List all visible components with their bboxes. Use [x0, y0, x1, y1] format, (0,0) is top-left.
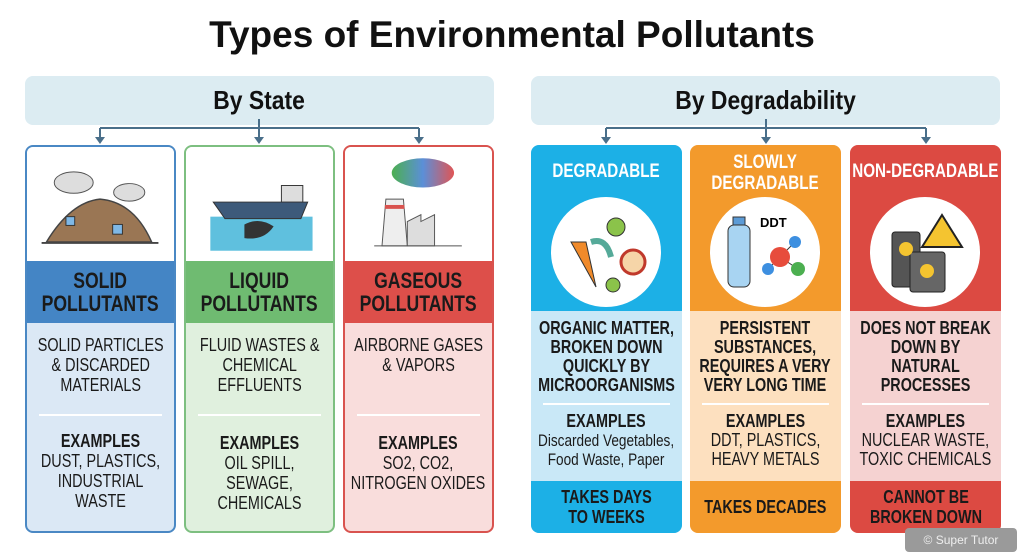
description and examples: EXAMPLES	[726, 411, 805, 431]
description and examples	[538, 318, 675, 469]
band title: POLLUTANTS	[42, 291, 159, 316]
description and examples: MATERIALS	[60, 375, 141, 395]
watermark	[905, 528, 1017, 552]
description and examples: NATURAL	[891, 356, 960, 376]
icon: landfill	[27, 147, 174, 261]
header: by degradability	[531, 76, 1000, 125]
description and examples: FLUID WASTES &	[200, 335, 319, 355]
icon: factory smoke	[345, 147, 492, 261]
description and examples: EFFLUENTS	[218, 375, 302, 395]
band title: GASEOUS	[374, 268, 463, 293]
description and examples: DOES NOT BREAK	[860, 318, 991, 338]
description and examples: Food Waste, Paper	[548, 450, 665, 469]
heading: DEGRADABLE	[553, 161, 660, 182]
duration: BROKEN DOWN	[870, 507, 982, 527]
panel: gaseous	[343, 145, 494, 533]
description and examples: TOXIC CHEMICALS	[860, 449, 991, 469]
description and examples: EXAMPLES	[220, 433, 299, 453]
description and examples: Discarded Vegetables,	[538, 431, 675, 450]
icon: organic waste	[551, 197, 661, 307]
description and examples: ORGANIC MATTER,	[539, 318, 674, 338]
band title: LIQUID	[230, 268, 289, 293]
duration: TAKES DECADES	[704, 497, 827, 517]
panel: liquid	[184, 145, 335, 533]
band title	[345, 261, 492, 323]
description and examples: EXAMPLES	[379, 433, 458, 453]
title: Types of Environmental Pollutants	[209, 14, 815, 55]
description and examples	[351, 335, 486, 493]
description and examples: NUCLEAR WASTE,	[862, 430, 989, 450]
description and examples: SO2, CO2,	[383, 453, 454, 473]
description and examples: CHEMICAL	[222, 355, 297, 375]
description and examples: OIL SPILL,	[225, 453, 294, 473]
band title	[27, 261, 174, 323]
description and examples: WASTE	[75, 491, 126, 511]
description and examples: & VAPORS	[382, 355, 455, 375]
band title: POLLUTANTS	[360, 291, 477, 316]
description and examples: CHEMICALS	[217, 493, 302, 513]
description and examples: DDT, PLASTICS,	[711, 430, 820, 450]
icon: bottle and ddt	[710, 197, 820, 307]
icon: radioactive barrels	[870, 197, 980, 307]
duration	[850, 481, 1001, 533]
description and examples: DOWN BY	[891, 337, 960, 357]
panel: slowly degradable	[690, 145, 841, 533]
panel: non-degradable	[850, 145, 1001, 533]
duration: CANNOT BE	[883, 487, 968, 507]
watermark: © Super Tutor	[924, 533, 998, 547]
panel: degradable	[531, 145, 682, 533]
description and examples: SOLID PARTICLES	[38, 335, 163, 355]
heading	[712, 152, 819, 194]
duration: TAKES DAYS	[561, 487, 652, 507]
description and examples: INDUSTRIAL	[58, 471, 143, 491]
description and examples: NITROGEN OXIDES	[351, 473, 486, 493]
description and examples	[700, 318, 831, 469]
heading: NON-DEGRADABLE	[852, 161, 999, 182]
description and examples: EXAMPLES	[567, 411, 646, 431]
connectors arrows	[95, 119, 931, 144]
description and examples: HEAVY METALS	[711, 449, 820, 469]
description and examples: QUICKLY BY	[563, 356, 650, 376]
description and examples: BROKEN DOWN	[550, 337, 662, 357]
header: by degradability: By Degradability	[675, 85, 856, 115]
duration	[531, 481, 682, 533]
icon: oil tanker	[186, 147, 333, 261]
description and examples: & DISCARDED	[51, 355, 150, 375]
description and examples: AIRBORNE GASES	[354, 335, 483, 355]
description and examples: MICROORGANISMS	[538, 375, 675, 395]
icon: bottle and ddt: DDT	[760, 215, 787, 230]
description and examples: PERSISTENT	[720, 318, 811, 338]
header: by state: By State	[214, 85, 305, 115]
description and examples: DUST, PLASTICS,	[41, 451, 160, 471]
heading: SLOWLY	[734, 152, 797, 173]
duration: TO WEEKS	[568, 507, 645, 527]
description and examples	[38, 335, 163, 511]
description and examples: VERY LONG TIME	[704, 375, 827, 395]
heading: DEGRADABLE	[712, 173, 819, 194]
header: by state	[25, 76, 494, 125]
description and examples: EXAMPLES	[61, 431, 140, 451]
description and examples: PROCESSES	[881, 375, 970, 395]
description and examples	[198, 335, 321, 513]
duration	[690, 481, 841, 533]
description and examples: EXAMPLES	[886, 411, 965, 431]
description and examples: REQUIRES A VERY	[700, 356, 831, 376]
band title	[186, 261, 333, 323]
band title: SOLID	[74, 268, 127, 293]
description and examples: SUBSTANCES,	[714, 337, 817, 357]
description and examples	[860, 318, 991, 469]
band title: POLLUTANTS	[201, 291, 318, 316]
description and examples: SEWAGE,	[226, 473, 293, 493]
panel: solid	[25, 145, 176, 533]
